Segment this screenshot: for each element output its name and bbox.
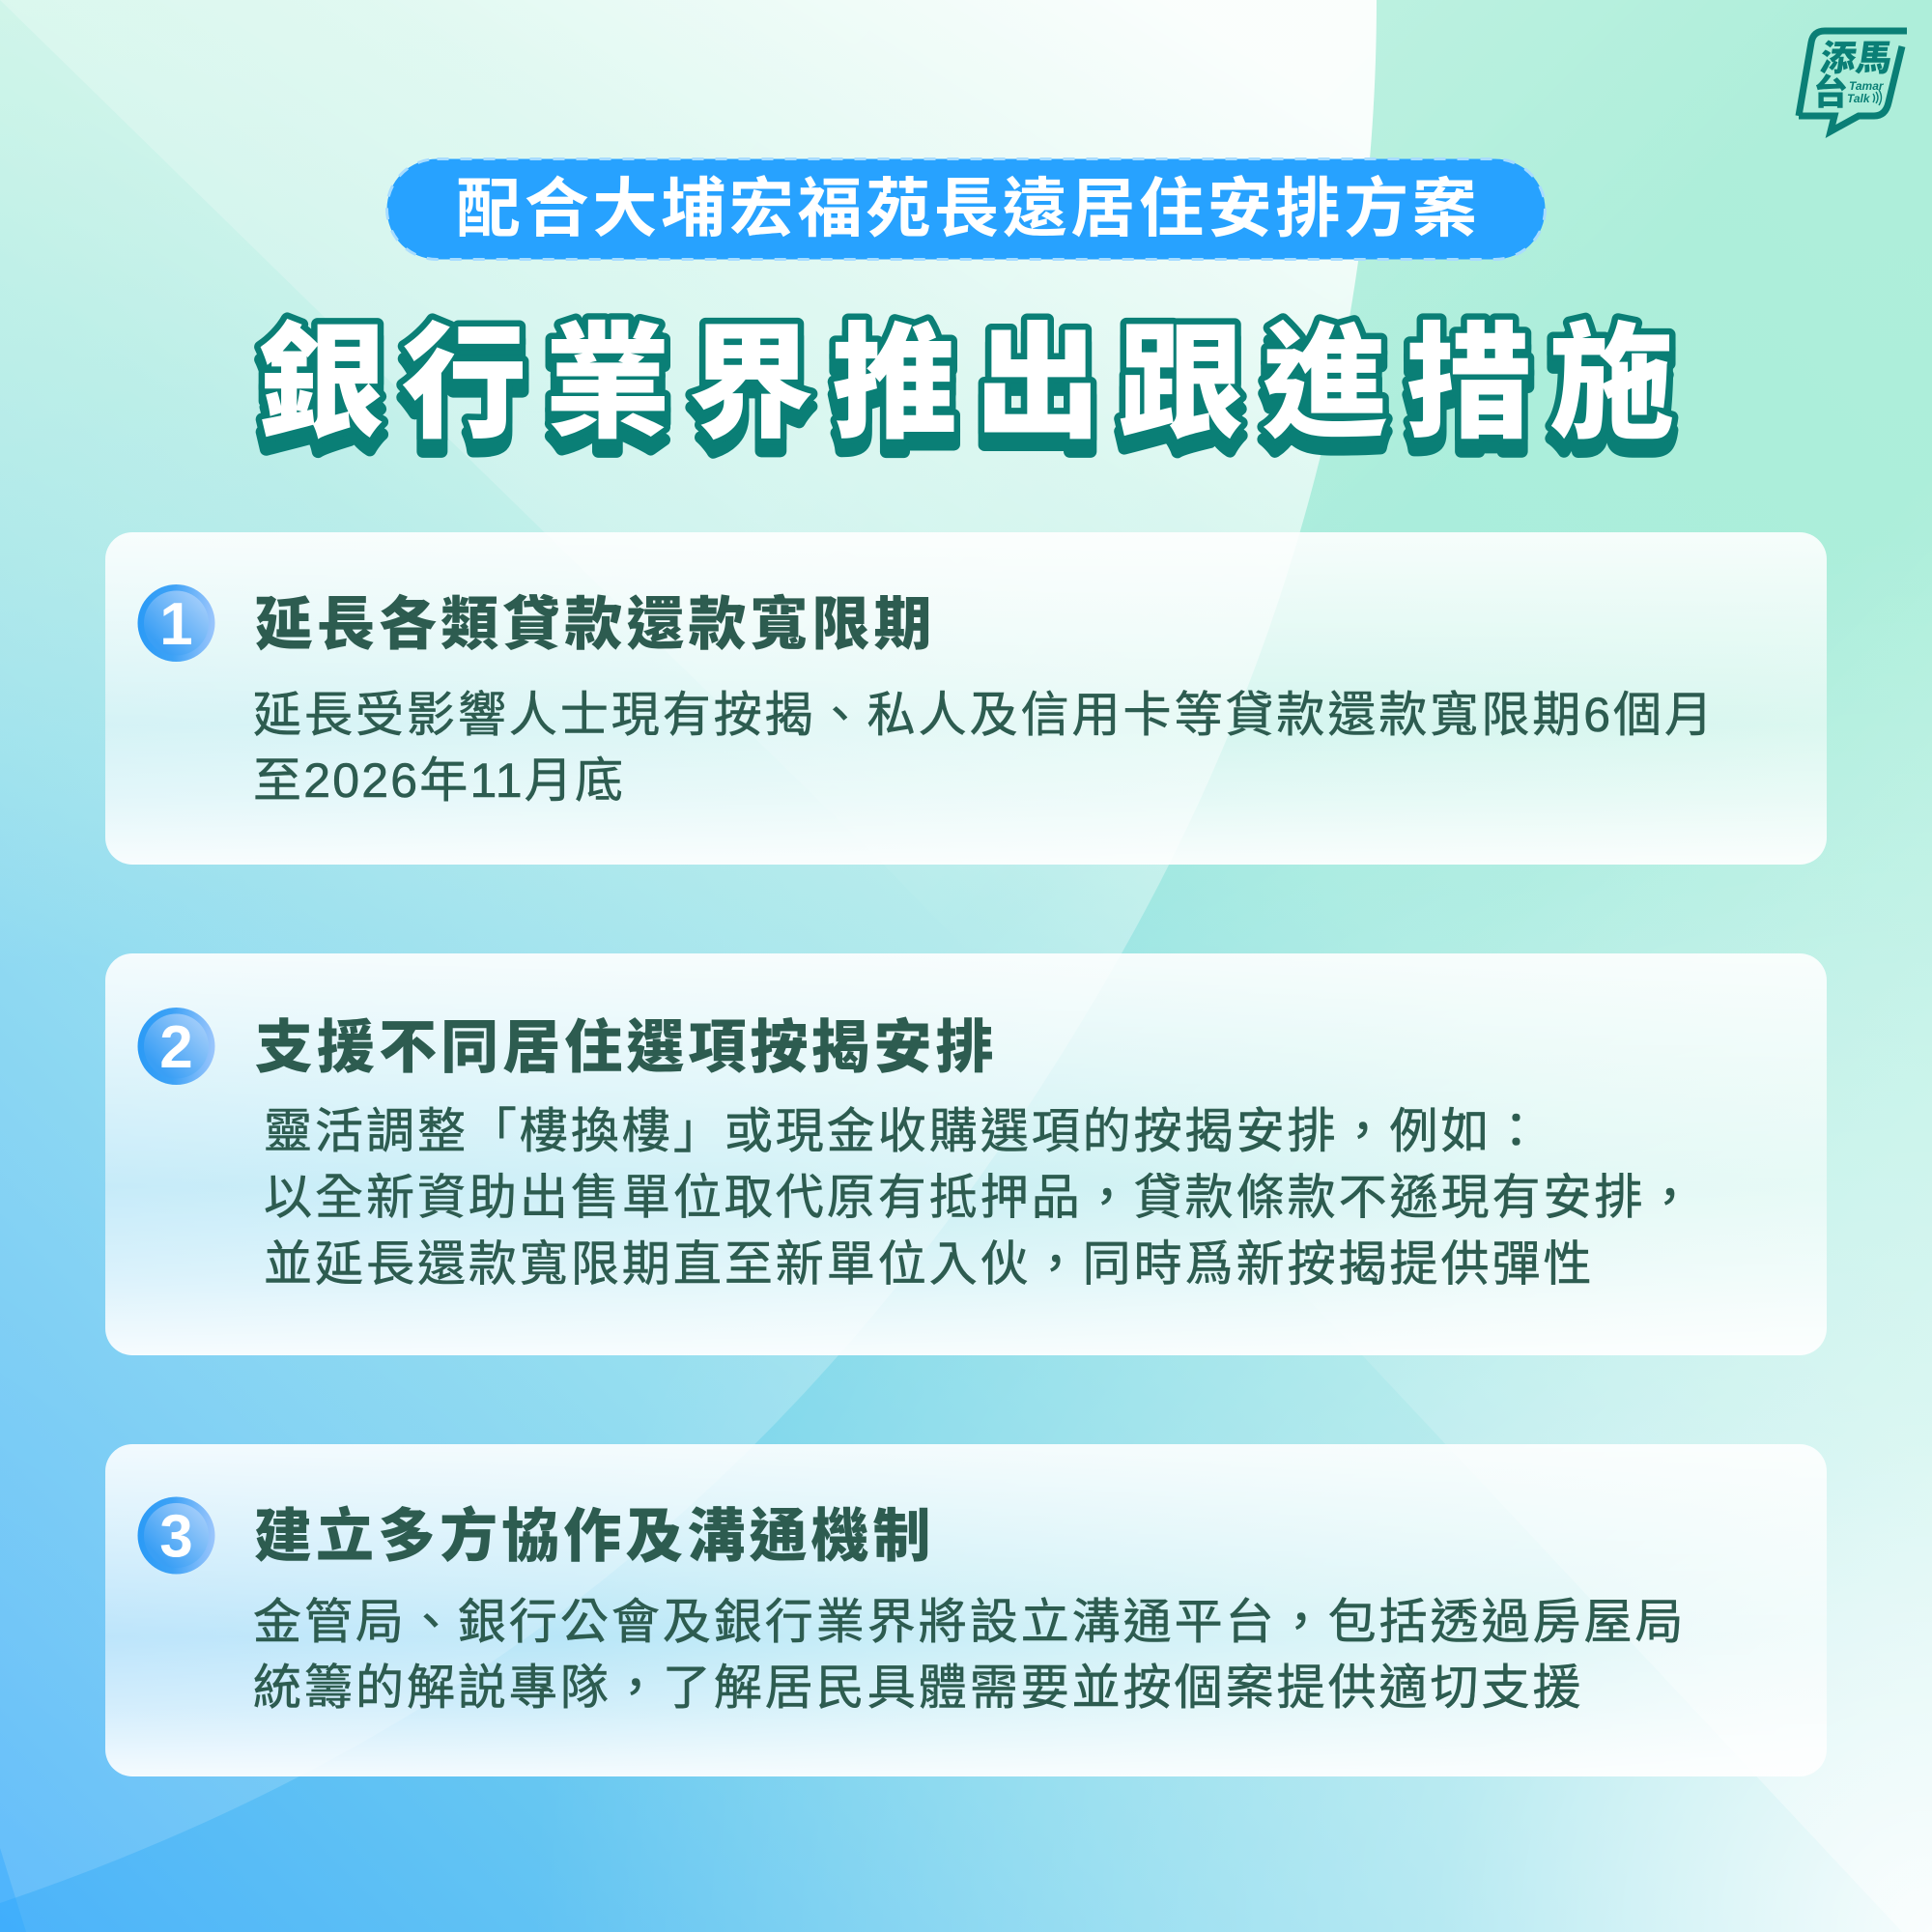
icon: number 1 [137, 584, 214, 662]
heading 3: 建立多方協作及溝通機制 [254, 1504, 935, 1569]
body 3 [253, 1595, 1686, 1715]
icon: sound waves [1873, 90, 1882, 105]
title: 銀行業界推出跟進措施 [258, 313, 1692, 454]
icon: number 1: 1 [159, 591, 193, 658]
body 2: 並延長還款寬限期直至新單位入伙，同時爲新按揭提供彈性 [264, 1236, 1594, 1291]
icon: number 3 [137, 1497, 214, 1575]
icon: number 3: 3 [159, 1503, 193, 1571]
body 2 [264, 1104, 1696, 1291]
icon: speech bubble [1799, 31, 1907, 131]
body 2: 以全新資助出售單位取代原有抵押品，貸款條款不遜現有安排， [264, 1171, 1696, 1225]
subtitle text: 配合大埔宏福苑長遠居住安排方案 [456, 173, 1480, 245]
panel: card 1 [105, 532, 1827, 865]
heading 2: 支援不同居住選項按揭安排 [255, 1015, 998, 1080]
panel: card 3 [105, 1444, 1827, 1776]
body 2: 靈活調整「樓換樓」或現金收購選項的按揭安排，例如： [264, 1104, 1544, 1158]
logo text: 台: 台 [1813, 72, 1848, 112]
logo text: 添馬: 添馬 [1818, 38, 1894, 78]
body 1 [253, 688, 1716, 808]
icon: number 2 [137, 1008, 214, 1085]
logo text: Tamar: Tamar [1849, 79, 1885, 93]
body 3: 統籌的解説專隊，了解居民具體需要並按個案提供適切支援 [253, 1661, 1583, 1715]
body 3: 金管局、銀行公會及銀行業界將設立溝通平台，包括透過房屋局 [253, 1595, 1686, 1649]
subtitle pill [386, 158, 1546, 259]
logo: Tamar Talk [1799, 31, 1907, 131]
heading 1: 延長各類貸款還款寬限期 [255, 592, 936, 657]
body 1: 至2026年11月底 [253, 753, 626, 808]
panel: card 2 [105, 953, 1827, 1355]
logo text: Talk: Talk [1847, 92, 1871, 105]
icon: number 2: 2 [159, 1014, 193, 1081]
body 1: 延長受影響人士現有按揭、私人及信用卡等貸款還款寬限期6個月 [253, 688, 1716, 742]
